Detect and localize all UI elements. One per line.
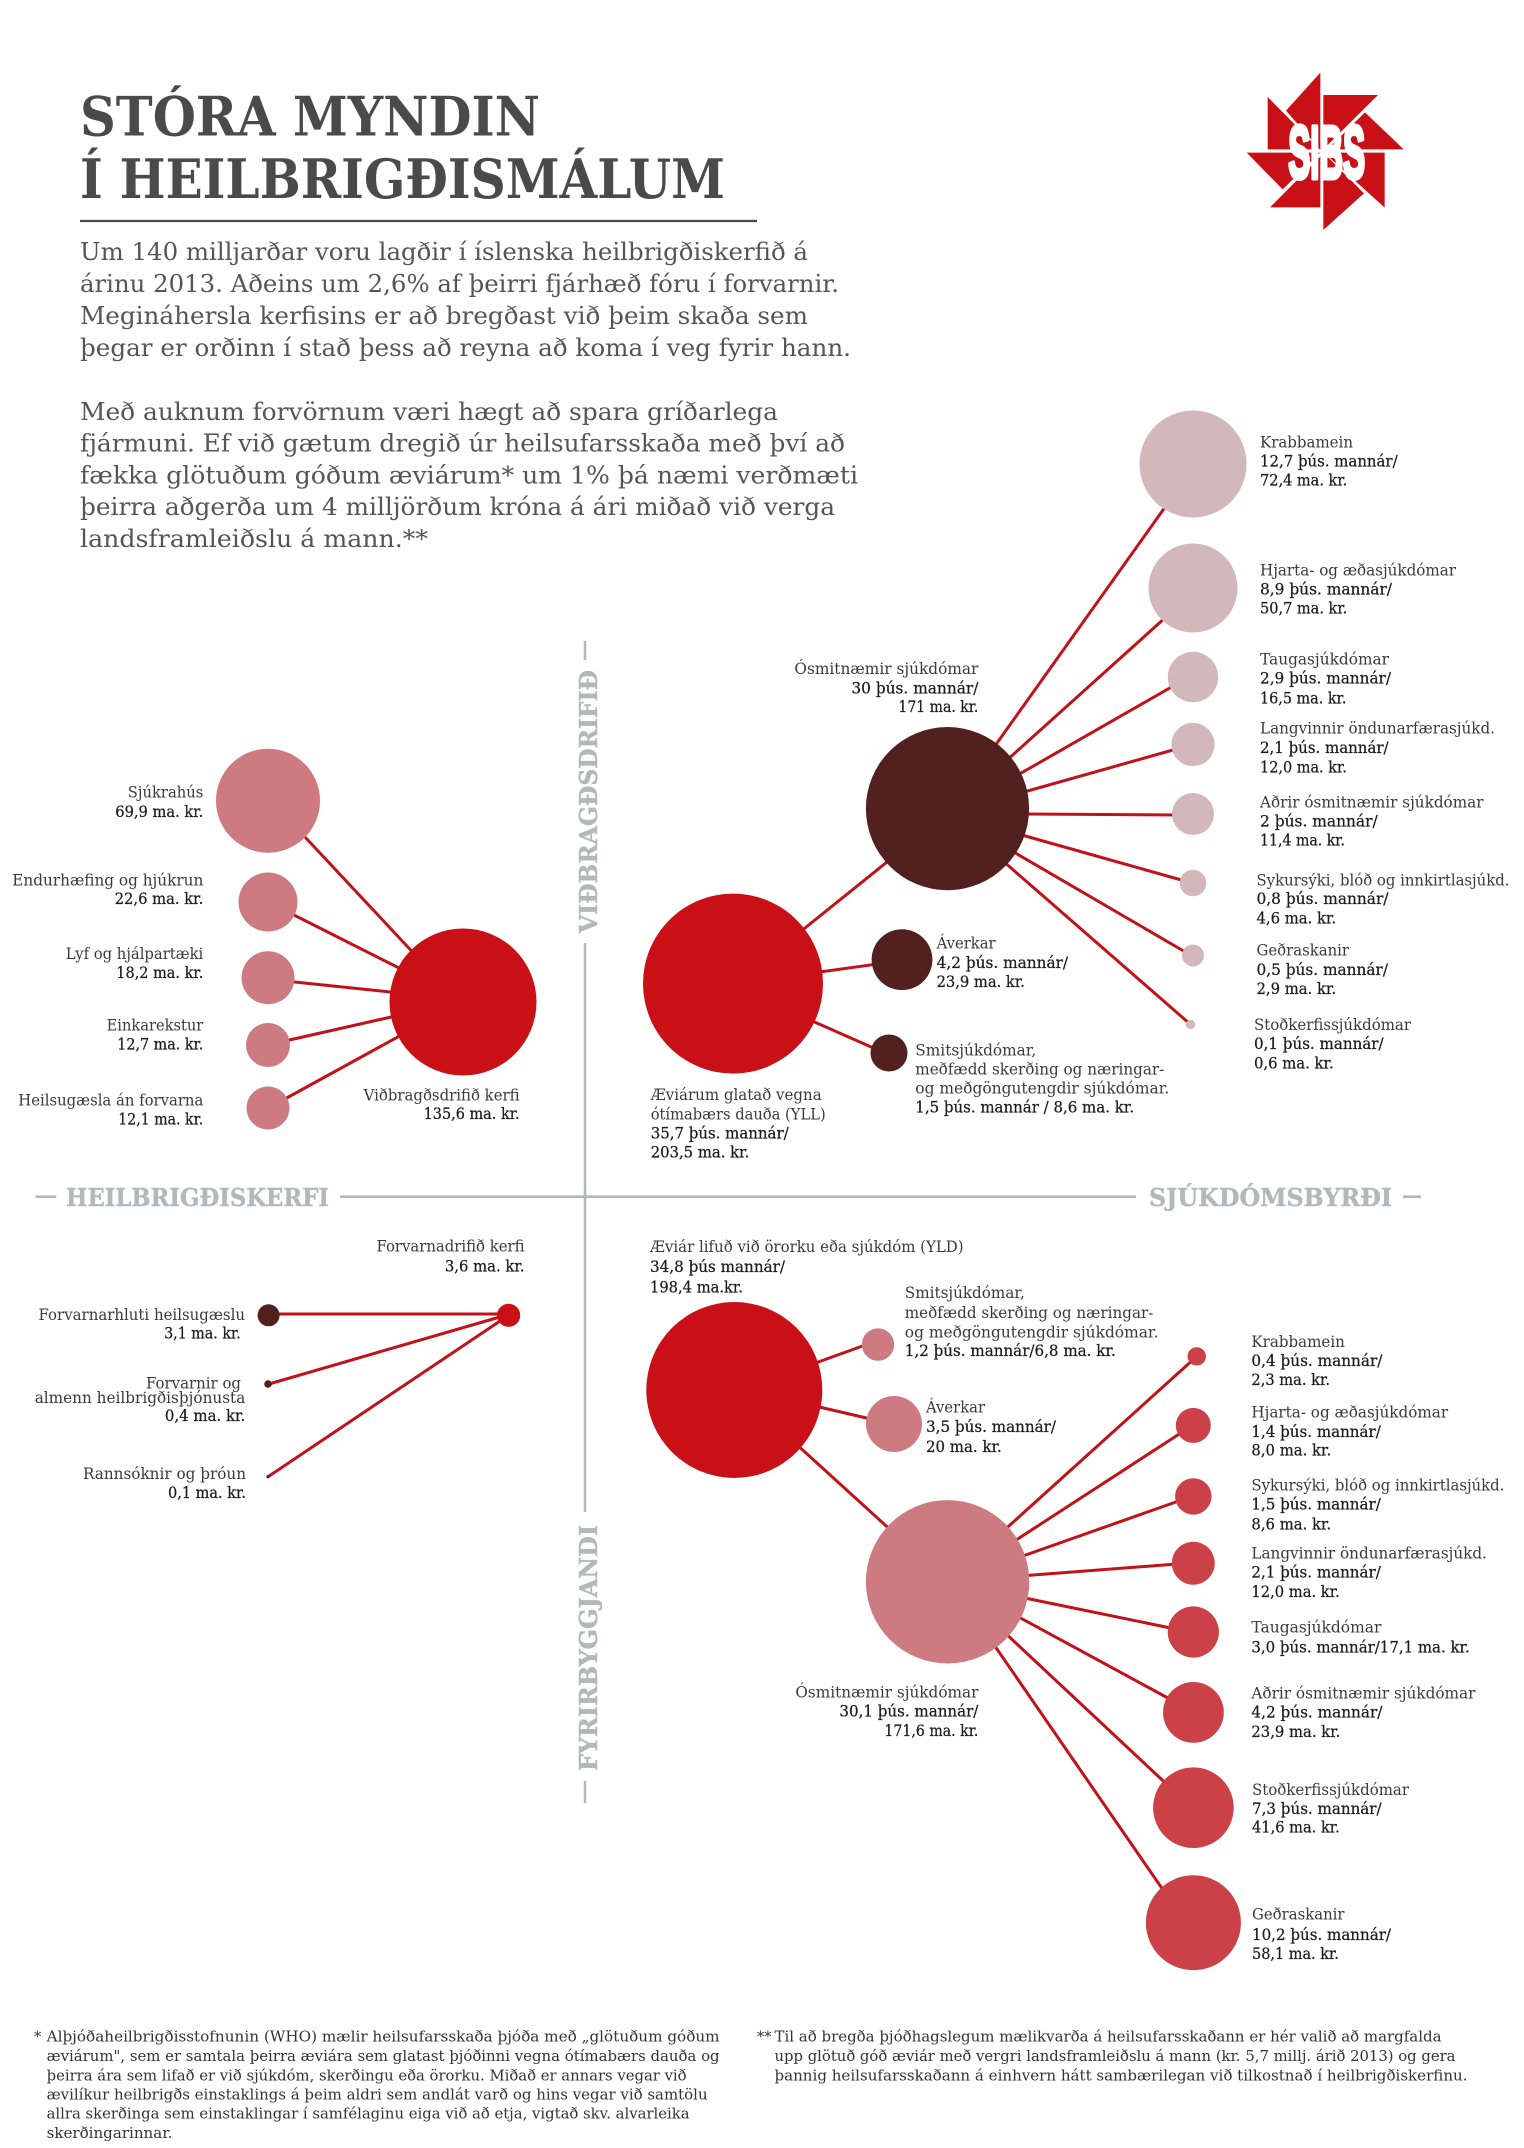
panel: years lived with disability [646, 1238, 1504, 1970]
connectors: reactive system [283, 837, 420, 1100]
item: Viðbragðsdrifið kerfi [363, 928, 536, 1123]
item: Æviárum glatað: Æviárum glatað vegna [650, 1086, 822, 1104]
title [80, 84, 757, 221]
item: Áverkar [866, 1396, 1057, 1456]
item: Ósmitnæmir sjúkdómar: 30,1 þús. mannár/ [839, 1703, 979, 1721]
item: Smitsjúkdómar [870, 1034, 1169, 1117]
item: Geðraskanir: 2,9 ma. kr. [1256, 980, 1336, 998]
item: Lyf og hjálpartæki: 18,2 ma. kr. [116, 964, 203, 982]
item: Áverkar: 4,2 þús. mannár/ [937, 954, 1069, 972]
footnote: WHO definition: þeirra ára sem lifað er við sjúkdóm, skerðingu eða örorku. Miðað er annars vegar við [47, 2068, 687, 2084]
item: Heilsugæsla án forvarna [18, 1086, 290, 1130]
item: Aðrir ósmitnæmir sjúkdómar [1163, 1682, 1476, 1743]
axis label: bottom: FYRIRBYGGJANDI [574, 1525, 603, 1771]
item: Krabbamein: Krabbamein [1260, 433, 1353, 451]
item: Endurhæfing og hjúkrun: Endurhæfing og hjúkrun [12, 871, 203, 889]
item: Smitsjúkdómar: Smitsjúkdómar, [905, 1284, 1025, 1302]
axis label: top: VIÐBRAGÐSDRIFIÐ [574, 670, 603, 934]
footnote: WHO definition: skerðingarinnar. [47, 2126, 173, 2142]
item: Geðraskanir [1182, 942, 1389, 998]
item: Krabbamein [1188, 1333, 1383, 1389]
item: Sykursýki, blóð og innkirtlasjúkd.: 1,5 þús. mannár/ [1251, 1496, 1382, 1514]
axis label: right: SJÚKDÓMSBYRÐI [1149, 1183, 1392, 1212]
item: Hjarta- og æðasjúkdómar [1176, 1404, 1449, 1460]
axes [36, 641, 1421, 1803]
item: Smitsjúkdómar: 1,5 þús. mannár / 8,6 ma. kr. [915, 1099, 1134, 1117]
title: Í HEILBRIGÐISMÁLUM [80, 147, 725, 211]
item: Krabbamein: 12,7 þús. mannár/ [1260, 453, 1398, 471]
item: Langvinnir öndunarfærasjúkd.: 12,0 ma. kr. [1260, 758, 1347, 776]
item: Sykursýki, blóð og innkirtlasjúkd.: 0,8 þús. mannár/ [1256, 890, 1389, 908]
item: Smitsjúkdómar [862, 1284, 1158, 1361]
item: Geðraskanir: Geðraskanir [1252, 1905, 1345, 1923]
item: Sjúkrahús: 69,9 ma. kr. [115, 803, 203, 821]
item: Æviárum glatað: 35,7 þús. mannár/ [651, 1124, 789, 1142]
item: Æviárum glatað [643, 894, 826, 1162]
item: Stoðkerfissjúkdómar: 0,1 þús. mannár/ [1254, 1035, 1384, 1053]
item: Rannsóknir og þróun [83, 1465, 270, 1502]
item: Viðbragðsdrifið kerfi: Viðbragðsdrifið kerfi [363, 1086, 520, 1104]
item: Aðrir ósmitnæmir sjúkdómar: Aðrir ósmitnæmir sjúkdómar [1259, 793, 1484, 811]
footnote: economic measure: upp glötuð góð æviár með vergri landsframleiðslu á mann (kr. 5,7 millj. árið 2013) og gera [774, 2049, 1456, 2065]
item: Hjarta- og æðasjúkdómar: Hjarta- og æðasjúkdómar [1251, 1404, 1449, 1422]
item: Taugasjúkdómar: 16,5 ma. kr. [1260, 690, 1346, 708]
item: Aðrir ósmitnæmir sjúkdómar [1172, 793, 1484, 849]
item: Æviárum glatað: ótímabærs dauða (YLL) [651, 1105, 826, 1123]
item: Krabbamein [1140, 410, 1398, 518]
item: Forvarnir og almenn heilbrigðisþjónusta [35, 1375, 272, 1425]
item: Sykursýki, blóð og innkirtlasjúkd.: Sykursýki, blóð og innkirtlasjúkd. [1256, 871, 1510, 889]
item: Taugasjúkdómar: Taugasjúkdómar [1251, 1618, 1382, 1636]
item: Geðraskanir [1146, 1875, 1392, 1970]
item: Forvarnadrifið kerfi: Forvarnadrifið kerfi [376, 1238, 524, 1256]
connectors: preventive system [268, 1314, 506, 1477]
item: Heilsugæsla án forvarna: Heilsugæsla án forvarna [18, 1091, 203, 1109]
item: Hjarta- og æðasjúkdómar: 8,9 þús. mannár/ [1260, 581, 1393, 599]
item: Sykursýki, blóð og innkirtlasjúkd.: 4,6 ma. kr. [1256, 909, 1336, 927]
footnote: economic measure: Til að bregða þjóðhagslegum mælikvarða á heilsufarsskaðann er hér valið að margfalda [774, 2030, 1442, 2046]
item: Sykursýki, blóð og innkirtlasjúkd.: Sykursýki, blóð og innkirtlasjúkd. [1251, 1477, 1504, 1495]
item: Stoðkerfissjúkdómar: 41,6 ma. kr. [1252, 1819, 1340, 1837]
item: Áverkar: 3,5 þús. mannár/ [926, 1418, 1057, 1436]
panel: years of life lost [643, 410, 1510, 1162]
item: Áverkar [872, 929, 1069, 991]
item: Smitsjúkdómar: meðfædd skerðing og næringar- [905, 1304, 1153, 1322]
item: Hjarta- og æðasjúkdómar: Hjarta- og æðasjúkdómar [1260, 561, 1457, 579]
intro text: second paragraph: fækka glötuðum góðum æviárum* um 1% þá næmi verðmæti [80, 460, 858, 490]
item: Forvarnadrifið kerfi: 3,6 ma. kr. [445, 1258, 524, 1276]
item: Langvinnir öndunarfærasjúkd.: Langvinnir öndunarfærasjúkd. [1251, 1545, 1487, 1563]
item: Geðraskanir: 10,2 þús. mannár/ [1252, 1926, 1392, 1944]
item: Stoðkerfissjúkdómar [1153, 1767, 1410, 1848]
item: Krabbamein: 72,4 ma. kr. [1260, 471, 1347, 489]
item: Endurhæfing og hjúkrun: 22,6 ma. kr. [115, 890, 203, 908]
item: Krabbamein: 2,3 ma. kr. [1251, 1371, 1330, 1389]
connectors: years of life lost [800, 503, 1190, 1050]
item: Smitsjúkdómar: meðfædd skerðing og næringar- [915, 1060, 1164, 1078]
item: Aðrir ósmitnæmir sjúkdómar: Aðrir ósmitnæmir sjúkdómar [1250, 1685, 1476, 1703]
intro text: second paragraph: þeirra aðgerða um 4 milljörðum króna á ári miðað við verga [80, 492, 835, 521]
item: Heilsugæsla án forvarna: 12,1 ma. kr. [118, 1110, 203, 1128]
item: Forvarnarhluti heilsugæslu: Forvarnarhluti heilsugæslu [38, 1306, 245, 1324]
item: Aðrir ósmitnæmir sjúkdómar: 11,4 ma. kr. [1260, 831, 1345, 849]
panel: preventive health system [35, 1238, 524, 1502]
item: Langvinnir öndunarfærasjúkd. [1171, 719, 1495, 776]
item: Forvarnir og almenn heilbrigðisþjónusta: 0,4 ma. kr. [165, 1407, 245, 1425]
item: Forvarnir og almenn heilbrigðisþjónusta: Forvarnir og [146, 1375, 241, 1393]
item: Áverkar: 23,9 ma. kr. [937, 973, 1025, 991]
item: Ósmitnæmir sjúkdómar: 171,6 ma. kr. [884, 1722, 978, 1740]
item: Sjúkrahús: Sjúkrahús [128, 783, 203, 801]
footnote: WHO definition: allra skerðinga sem einstaklingar í samfélaginu eiga við að etja, vigtað skv. alvarleika [47, 2107, 690, 2123]
item: Smitsjúkdómar: og meðgöngutengdir sjúkdómar. [915, 1080, 1169, 1098]
item: Æviár lifuð við örorku eða sjúkdóm: Æviár lifuð við örorku eða sjúkdóm (YLD) [649, 1238, 964, 1256]
item: Aðrir ósmitnæmir sjúkdómar: 2 þús. mannár/ [1260, 812, 1378, 830]
item: Stoðkerfissjúkdómar: 0,6 ma. kr. [1254, 1054, 1334, 1072]
item: Taugasjúkdómar: 2,9 þús. mannár/ [1260, 670, 1392, 688]
item: Áverkar: Áverkar [925, 1398, 986, 1416]
item: Hjarta- og æðasjúkdómar: 50,7 ma. kr. [1260, 600, 1347, 618]
item: Langvinnir öndunarfærasjúkd. [1172, 1542, 1487, 1601]
item: Rannsóknir og þróun: Rannsóknir og þróun [83, 1465, 246, 1483]
item: Taugasjúkdómar [1168, 1606, 1470, 1658]
item: Sjúkrahús [115, 749, 320, 853]
item: Langvinnir öndunarfærasjúkd.: 12,0 ma. kr. [1251, 1583, 1340, 1601]
intro text: first paragraph [80, 237, 851, 362]
footnote: economic measure: þannig heilsufarsskaðann á einhvern hátt sambærilegan við tilkostnað í heilbrigðiskerfinu. [774, 2068, 1468, 2084]
item: Forvarnadrifið kerfi [376, 1238, 524, 1327]
footnote: WHO definition: ævilíkur heilbrigðs einstaklings á þeim aldri sem andlát varð og hins vegar við samtölu [47, 2088, 708, 2104]
item: Æviárum glatað: 203,5 ma. kr. [651, 1144, 749, 1162]
item: Áverkar: Áverkar [936, 935, 996, 953]
intro text: second paragraph: landsframleiðslu á mann.** [80, 524, 428, 553]
footnote: WHO definition: * [34, 2030, 42, 2046]
item: Æviár lifuð við örorku eða sjúkdóm: 198,4 ma.kr. [650, 1278, 743, 1296]
item: Ósmitnæmir sjúkdómar: Ósmitnæmir sjúkdómar [795, 1684, 979, 1702]
intro text: second paragraph: Með auknum forvörnum væri hægt að spara gríðarlega [80, 397, 778, 426]
item: Ósmitnæmir sjúkdómar [795, 1500, 1029, 1740]
intro text: first paragraph: Megináhersla kerfisins er að bregðast við þeim skaða sem [80, 301, 808, 330]
intro text: first paragraph: árinu 2013. Aðeins um 2,6% af þeirri fjárhæð fóru í forvarnir. [80, 269, 839, 298]
connectors: years lived with disability [795, 1344, 1196, 1900]
item: Langvinnir öndunarfærasjúkd.: 2,1 þús. mannár/ [1260, 739, 1389, 757]
footnote: WHO definition [34, 2030, 720, 2142]
item: Einkarekstur: 12,7 ma. kr. [117, 1035, 203, 1053]
logo: SÍBS pinwheel: SIBS [1288, 111, 1365, 194]
logo: SÍBS pinwheel [1247, 73, 1404, 230]
item: Æviár lifuð við örorku eða sjúkdóm: 34,8 þús mannár/ [650, 1258, 786, 1276]
item: Ósmitnæmir sjúkdómar: 171 ma. kr. [898, 698, 978, 716]
item: Ósmitnæmir sjúkdómar: Ósmitnæmir sjúkdómar [794, 660, 979, 678]
item: Forvarnarhluti heilsugæslu: 3,1 ma. kr. [164, 1325, 241, 1343]
item: Einkarekstur [107, 1016, 290, 1067]
item: Hjarta- og æðasjúkdómar [1148, 544, 1457, 632]
item: Stoðkerfissjúkdómar [1186, 1016, 1412, 1072]
intro text: second paragraph [80, 397, 858, 553]
item: Rannsóknir og þróun: 0,1 ma. kr. [168, 1484, 246, 1502]
item: Stoðkerfissjúkdómar: Stoðkerfissjúkdómar [1252, 1781, 1410, 1799]
panel: reactive health system [12, 749, 536, 1130]
item: Sykursýki, blóð og innkirtlasjúkd.: 8,6 ma. kr. [1251, 1515, 1331, 1533]
item: Sykursýki, blóð og innkirtlasjúkd. [1180, 870, 1510, 927]
item: Einkarekstur: Einkarekstur [107, 1016, 204, 1034]
footnote: economic measure: ** [757, 2030, 772, 2046]
item: Geðraskanir: Geðraskanir [1256, 942, 1350, 960]
item: Lyf og hjálpartæki [66, 945, 294, 1004]
item: Geðraskanir: 0,5 þús. mannár/ [1256, 961, 1389, 979]
intro text: first paragraph: Um 140 milljarðar voru lagðir í íslenska heilbrigðiskerfið á [80, 237, 808, 266]
footnote: economic measure [757, 2030, 1468, 2084]
item: Ósmitnæmir sjúkdómar: 30 þús. mannár/ [851, 679, 979, 697]
title: STÓRA MYNDIN [80, 84, 540, 148]
footnote: WHO definition: æviárum", sem er samtala þeirra æviára sem glatast þjóðinni vegna ótímabærs dauða og [47, 2049, 720, 2065]
item: Taugasjúkdómar: 3,0 þús. mannár/17,1 ma. kr. [1251, 1638, 1470, 1656]
item: Æviár lifuð við örorku eða sjúkdóm [646, 1238, 964, 1478]
footnote: WHO definition: Alþjóðaheilbrigðisstofnunin (WHO) mælir heilsufarsskaða þjóða með „glötuðum góðum [46, 2030, 720, 2046]
item: Smitsjúkdómar: 1,2 þús. mannár/6,8 ma. kr. [905, 1342, 1116, 1360]
item: Stoðkerfissjúkdómar: 7,3 þús. mannár/ [1252, 1800, 1382, 1818]
item: Langvinnir öndunarfærasjúkd.: Langvinnir öndunarfærasjúkd. [1260, 719, 1495, 737]
item: Aðrir ósmitnæmir sjúkdómar: 23,9 ma. kr. [1251, 1723, 1340, 1741]
intro text: second paragraph: fjármuni. Ef við gætum dregið úr heilsufarsskaða með því að [80, 428, 845, 458]
item: Forvarnarhluti heilsugæslu [38, 1304, 280, 1343]
item: Stoðkerfissjúkdómar: Stoðkerfissjúkdómar [1254, 1016, 1412, 1034]
item: Krabbamein: 0,4 þús. mannár/ [1251, 1352, 1383, 1370]
item: Sykursýki, blóð og innkirtlasjúkd. [1175, 1477, 1504, 1533]
item: Ósmitnæmir sjúkdómar [794, 660, 1029, 890]
item: Aðrir ósmitnæmir sjúkdómar: 4,2 þús. mannár/ [1251, 1704, 1383, 1722]
item: Taugasjúkdómar: Taugasjúkdómar [1260, 650, 1390, 668]
item: Taugasjúkdómar [1168, 650, 1392, 708]
item: Viðbragðsdrifið kerfi: 135,6 ma. kr. [424, 1105, 520, 1123]
item: Langvinnir öndunarfærasjúkd.: 2,1 þús. mannár/ [1251, 1564, 1382, 1582]
axis label: left: HEILBRIGÐISKERFI [66, 1183, 329, 1212]
intro text: first paragraph: þegar er orðinn í stað þess að reyna að koma í veg fyrir hann. [80, 333, 851, 362]
item: Hjarta- og æðasjúkdómar: 1,4 þús. mannár/ [1251, 1423, 1382, 1441]
item: Áverkar: 20 ma. kr. [926, 1438, 1002, 1456]
item: Geðraskanir: 58,1 ma. kr. [1252, 1945, 1339, 1963]
item: Hjarta- og æðasjúkdómar: 8,0 ma. kr. [1251, 1442, 1331, 1460]
item: Lyf og hjálpartæki: Lyf og hjálpartæki [66, 945, 203, 963]
item: Krabbamein: Krabbamein [1251, 1333, 1345, 1351]
item: Smitsjúkdómar: Smitsjúkdómar, [915, 1042, 1036, 1060]
item: Forvarnir og almenn heilbrigðisþjónusta: almenn heilbrigðisþjónusta [35, 1389, 245, 1407]
item: Smitsjúkdómar: og meðgöngutengdir sjúkdómar. [905, 1324, 1158, 1342]
item: Endurhæfing og hjúkrun [12, 871, 298, 932]
